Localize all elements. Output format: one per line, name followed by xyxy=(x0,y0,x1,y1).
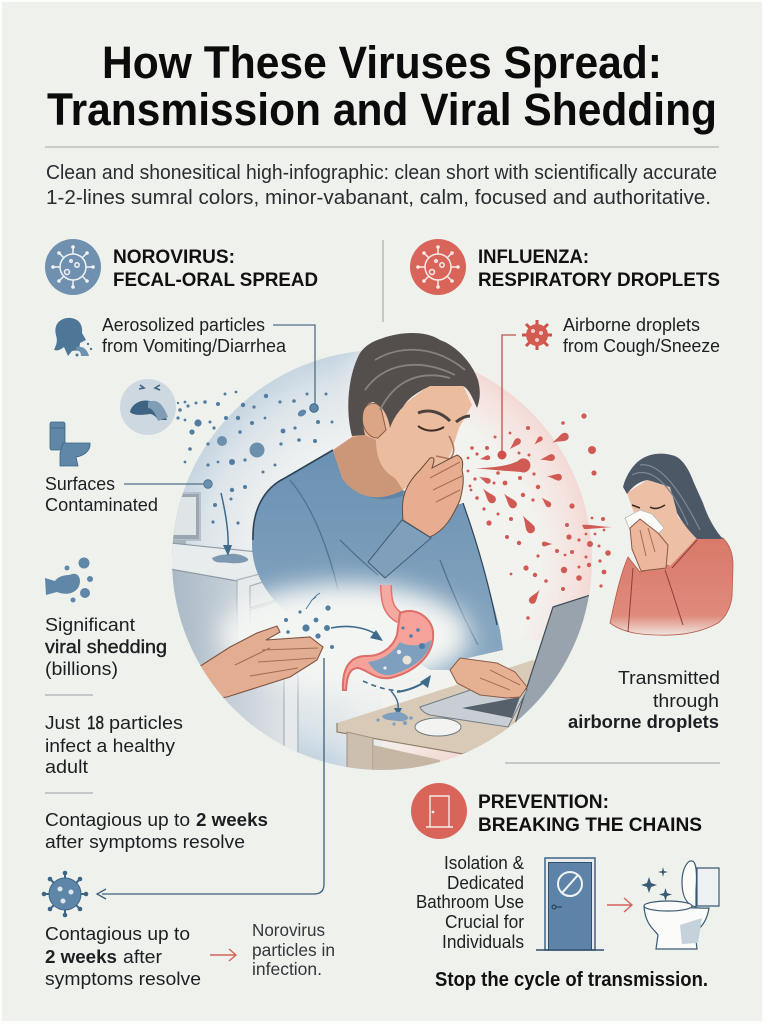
man: sleeve cuff xyxy=(368,520,431,578)
icon: person vomiting xyxy=(54,318,92,356)
circle background xyxy=(172,350,600,770)
arrow: droplets landing on desk xyxy=(221,493,232,556)
leader line: aerosolized particles xyxy=(273,325,318,418)
panel: influenza xyxy=(410,239,720,732)
text: aerosolized particles: from Vomiting/Diarrhea xyxy=(102,335,287,356)
man: sweater xyxy=(252,450,503,670)
text: surfaces contaminated: Surfaces xyxy=(45,473,115,494)
central circle illustration xyxy=(160,350,600,780)
text: stop the cycle: Stop the cycle of transmission. xyxy=(435,969,708,991)
text: isolation: Bathroom Use xyxy=(416,891,524,912)
subtitle text block xyxy=(46,162,717,209)
text: 18 particles: infect a healthy xyxy=(45,735,176,756)
man: ear xyxy=(362,403,386,438)
white fade around stomach xyxy=(220,583,470,687)
text: significant viral shedding: viral shedding xyxy=(45,636,167,657)
text: contagious up to 2 weeks: 2 weeks xyxy=(196,809,268,830)
woman: hands xyxy=(630,519,668,571)
heading: prevention: BREAKING THE CHAINS xyxy=(478,814,702,836)
text: aerosolized particles: Aerosolized particles xyxy=(102,314,265,335)
text: isolation: Isolation & xyxy=(444,852,525,873)
subtitle text block: Clean and shonesitical high-infographic: clean short with scientifically accurate xyxy=(46,162,717,184)
text: airborne droplets from cough: from Cough/Sneeze xyxy=(563,335,720,356)
text: aerosolized particles xyxy=(102,314,287,356)
icon: door xyxy=(536,858,604,950)
man: hair xyxy=(348,333,480,436)
woman: skin xyxy=(627,480,697,566)
arrow: hand to stomach xyxy=(331,626,383,641)
heading: influenza xyxy=(478,246,720,291)
text: surfaces contaminated: Contaminated xyxy=(45,494,158,515)
icon: influenza badge xyxy=(410,239,466,295)
text: significant viral shedding: Significant xyxy=(45,614,135,635)
man: hand over mouth xyxy=(402,455,463,537)
text: significant viral shedding: (billions) xyxy=(45,658,118,679)
text: contagious second xyxy=(45,923,201,989)
text: transmitted through airborne droplets xyxy=(568,667,720,732)
text: surfaces contaminated xyxy=(45,473,158,515)
man: closed eye and brow xyxy=(418,426,444,431)
text: 18 particles: adult xyxy=(45,756,88,777)
woman sneezing xyxy=(610,454,733,635)
heading: prevention xyxy=(478,791,702,836)
text: isolation: Dedicated xyxy=(447,872,524,893)
stomach diagram xyxy=(343,585,433,690)
contaminated spot on left desk xyxy=(212,554,248,563)
heading: influenza: RESPIRATORY DROPLETS xyxy=(478,269,720,291)
text: norovirus particles in infection xyxy=(252,920,335,979)
text: airborne droplets from cough: Airborne droplets xyxy=(563,314,700,335)
woman: closed eye xyxy=(632,505,665,508)
left hand xyxy=(200,625,324,698)
arrow: red xyxy=(210,949,236,961)
blue aerosol particles xyxy=(165,391,334,525)
panel: prevention xyxy=(411,783,719,991)
title: How These Viruses Spread: xyxy=(102,37,662,88)
monitor on left desk xyxy=(172,492,201,554)
woman: tissue xyxy=(625,510,664,534)
leader line: surfaces xyxy=(124,480,212,488)
text: contagious second: symptoms resolve xyxy=(45,968,201,989)
man: neck and face xyxy=(333,385,472,497)
dashed arrow from stomach xyxy=(363,675,431,716)
woman: sweater xyxy=(610,538,733,635)
icon: viral shedding blob xyxy=(45,558,93,602)
icon: virus xyxy=(42,871,88,917)
subtitle text block: 1-2-lines sumral colors, minor-vabanant, calm, focused and authoritative. xyxy=(46,187,711,209)
text: 18 particles xyxy=(45,712,183,777)
heading: influenza: INFLUENZA: xyxy=(478,246,589,268)
title xyxy=(47,37,717,135)
text: isolation xyxy=(416,852,525,952)
text: 18 particles: 18 xyxy=(87,712,104,733)
woman: hair xyxy=(623,454,723,539)
arrow: hand to virus icon xyxy=(97,658,324,899)
text: 18 particles: Just xyxy=(45,712,80,733)
icon: red virus xyxy=(522,320,552,350)
text: significant viral shedding xyxy=(45,614,167,679)
left desk with drawers xyxy=(172,542,299,752)
icon: vomiting face xyxy=(120,379,176,435)
leader line: airborne xyxy=(498,335,516,460)
right desk xyxy=(337,660,560,780)
particles near hand xyxy=(284,593,334,649)
contaminated spot on desk xyxy=(376,712,413,726)
text: norovirus particles in infection: infection. xyxy=(252,959,322,979)
text: transmitted through airborne droplets: airborne droplets xyxy=(568,711,719,732)
text: 18 particles: particles xyxy=(109,712,183,733)
laptop xyxy=(420,592,600,727)
man: hand on laptop xyxy=(450,658,527,698)
arrow: door to toilet xyxy=(607,898,632,912)
panel: norovirus xyxy=(42,239,335,989)
icon: toilet xyxy=(50,422,90,466)
text: contagious second: after xyxy=(123,946,162,967)
text: contagious second: Contagious up to xyxy=(45,923,190,944)
text: norovirus particles in infection: particles in xyxy=(252,940,335,960)
icon: toilet clean xyxy=(641,861,719,949)
text: isolation: Crucial for xyxy=(445,911,524,932)
mouse xyxy=(415,718,461,736)
text: isolation: Individuals xyxy=(442,931,524,952)
text: transmitted through airborne droplets: Transmitted xyxy=(618,667,720,688)
man: head and neck xyxy=(333,333,480,578)
text: transmitted through airborne droplets: through xyxy=(653,690,719,711)
text: contagious up to 2 weeks: Contagious up to xyxy=(45,809,190,830)
title: Transmission and Viral Shedding xyxy=(47,84,717,135)
text: contagious up to 2 weeks xyxy=(45,809,268,852)
heading: norovirus: NOROVIRUS: xyxy=(113,246,235,268)
heading: norovirus: FECAL-ORAL SPREAD xyxy=(113,269,318,291)
heading: prevention: PREVENTION: xyxy=(478,791,609,813)
icon: norovirus badge xyxy=(45,239,101,295)
heading: norovirus xyxy=(113,246,318,291)
red droplets xyxy=(467,413,612,620)
text: contagious second: 2 weeks xyxy=(45,946,117,967)
text: contagious up to 2 weeks: after symptoms resolve xyxy=(45,831,245,852)
icon: door badge xyxy=(411,783,467,839)
text: norovirus particles in infection: Norovirus xyxy=(252,920,325,940)
text: airborne droplets from cough xyxy=(563,314,720,356)
